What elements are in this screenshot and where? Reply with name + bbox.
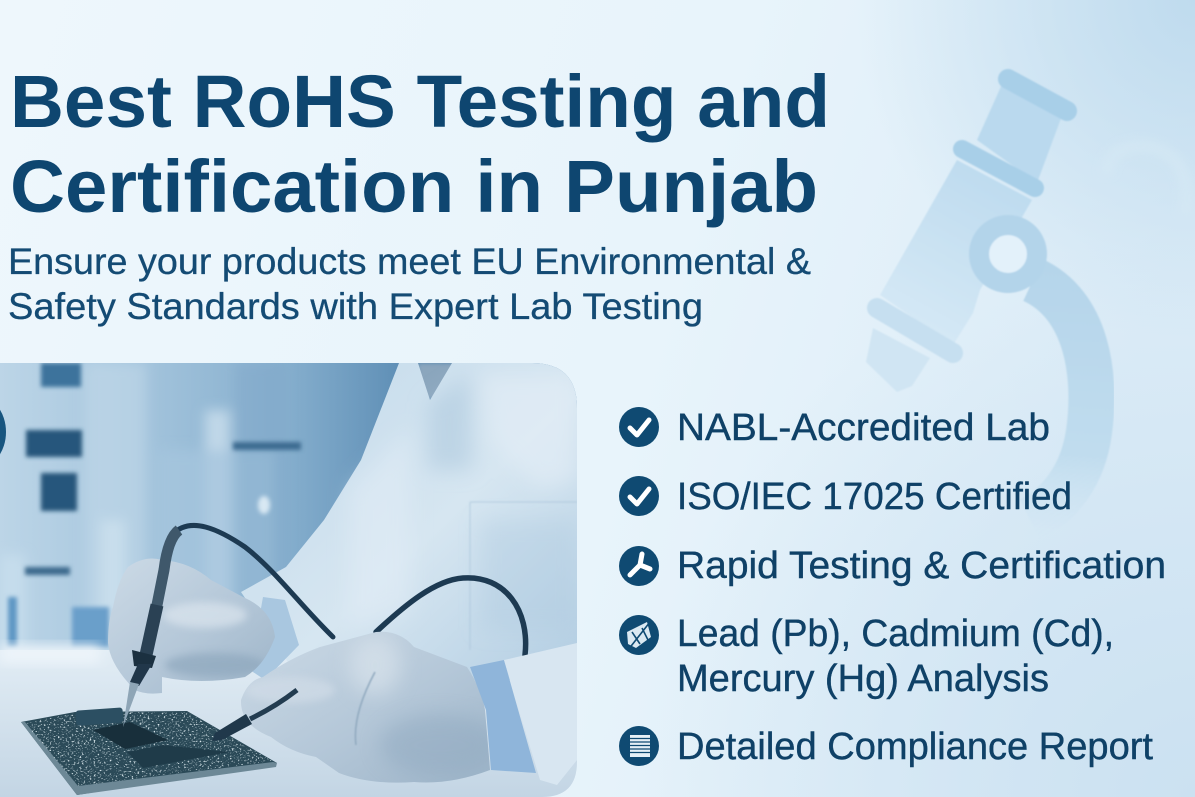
feature: ISO/IEC 17025 certified: ISO/IEC 17025 Certified xyxy=(677,476,1072,518)
feature: lead, cadmium, mercury analysis xyxy=(619,613,1114,700)
photo: technician testing a circuit board xyxy=(0,363,577,797)
microscope lower band xyxy=(877,308,953,353)
subtitle xyxy=(8,241,811,327)
right probe pen xyxy=(212,690,297,741)
circuit board xyxy=(21,707,277,795)
right cuff xyxy=(470,660,536,773)
cable 1 xyxy=(172,525,333,637)
microscope lower tube xyxy=(880,160,1032,345)
cable 2 xyxy=(376,578,526,655)
right sleeve xyxy=(504,643,577,785)
feature: rapid testing and certification: Rapid Testing & Certification xyxy=(677,545,1166,587)
title: Certification in Punjab xyxy=(10,145,818,228)
feature: lead, cadmium, mercury analysis: Lead (Pb), Cadmium (Cd), xyxy=(677,613,1114,655)
feature: lead, cadmium, mercury analysis: Mercury (Hg) Analysis xyxy=(677,658,1049,700)
subtitle: Safety Standards with Expert Lab Testing xyxy=(8,286,703,327)
microscope focus ring xyxy=(979,225,1037,283)
left probe pen xyxy=(123,530,179,727)
blurred lab equipment xyxy=(4,363,238,650)
feature: detailed compliance report: Detailed Compliance Report xyxy=(677,726,1153,768)
microscope top band xyxy=(1008,79,1067,111)
icon: faint background ring xyxy=(1107,146,1187,215)
neck xyxy=(418,363,454,399)
microscope middle band xyxy=(962,149,1035,188)
microscope nosepiece xyxy=(866,328,930,392)
dark circle at left edge xyxy=(0,410,6,454)
feature list xyxy=(619,407,1166,768)
feature: NABL-accredited lab: NABL-Accredited Lab xyxy=(677,407,1050,449)
right hand glove xyxy=(241,632,500,783)
microscope upper tube xyxy=(977,82,1063,183)
left hand glove xyxy=(108,559,275,694)
title: Best RoHS Testing and xyxy=(10,60,830,143)
lab coat xyxy=(241,363,577,680)
icon: watermark microscope xyxy=(866,79,1091,520)
table xyxy=(0,650,577,797)
left sleeve cuff xyxy=(250,597,299,680)
subtitle: Ensure your products meet EU Environmental & xyxy=(8,241,811,282)
title xyxy=(10,60,830,228)
lab backdrop xyxy=(0,363,577,663)
microscope arm xyxy=(1030,280,1091,520)
